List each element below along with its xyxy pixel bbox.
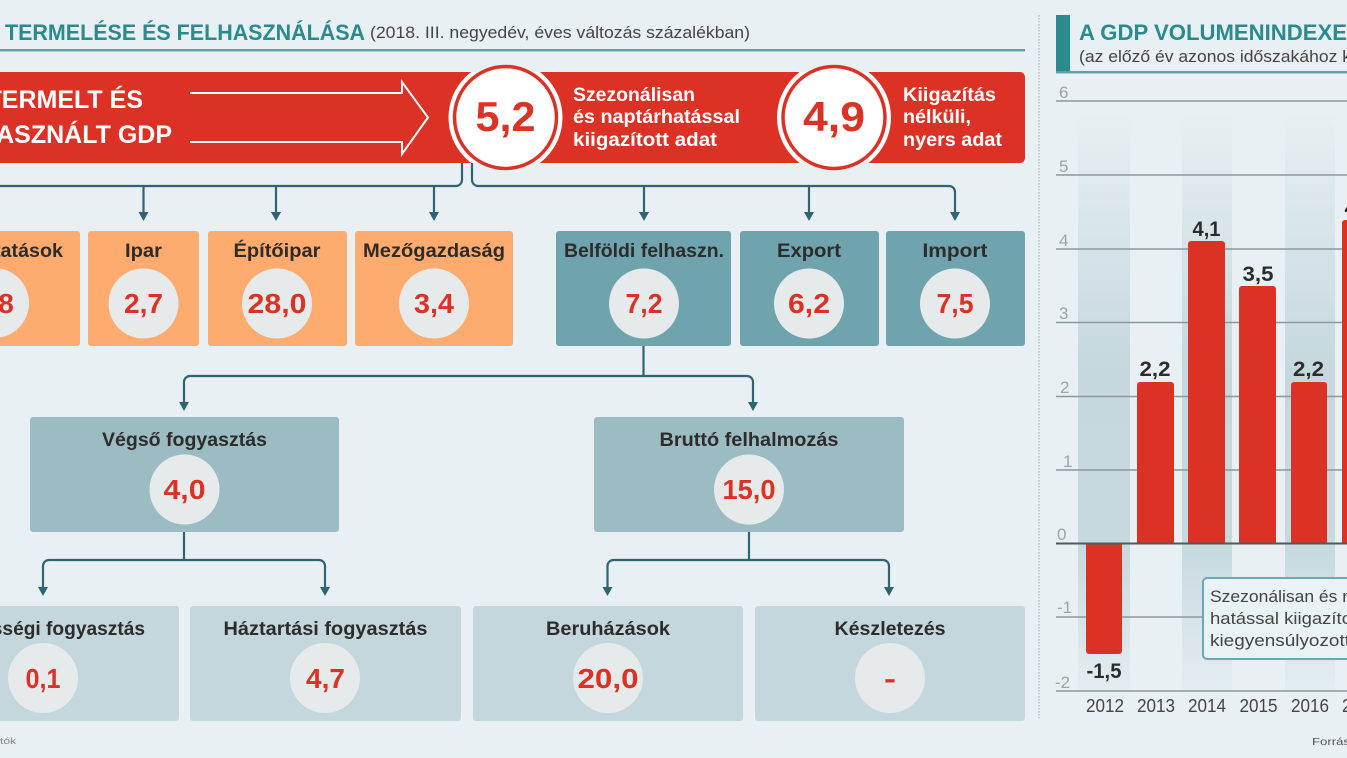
panel: investments bbox=[473, 606, 743, 721]
panel: construction: 28,0 bbox=[248, 288, 306, 319]
raw data caption bbox=[903, 85, 1003, 151]
gridlines and y axis: 6 bbox=[1059, 83, 1068, 102]
panel: inventories bbox=[755, 606, 1025, 721]
raw value circle: 4,9 bbox=[803, 93, 865, 140]
year labels: 2012 bbox=[1086, 696, 1124, 716]
value labels bbox=[1086, 197, 1347, 683]
panel: inventories: Készletezés bbox=[834, 619, 946, 640]
panel: red GDP banner bbox=[0, 60, 1025, 174]
panel: export bbox=[740, 231, 879, 346]
adjusted value circle bbox=[448, 60, 562, 174]
heading: GDP volume index bbox=[1056, 15, 1347, 73]
gridlines and y axis: -2 bbox=[1055, 673, 1070, 692]
heading: GDP volume index: A GDP VOLUMENINDEXE bbox=[1079, 20, 1347, 45]
panel: household consumption: Háztartási fogyasztás bbox=[224, 619, 428, 640]
panel: household consumption bbox=[190, 606, 461, 721]
panel: gross capital formation: Bruttó felhalmozás bbox=[660, 430, 838, 451]
panel: export: Export bbox=[777, 241, 842, 262]
gridlines and y axis: -1 bbox=[1057, 598, 1072, 617]
panel: domestic use: Belföldi felhaszn. bbox=[564, 241, 724, 262]
panel: import: 7,5 bbox=[936, 288, 974, 319]
value labels: -1,5 bbox=[1086, 660, 1122, 683]
panel: gross capital formation: 15,0 bbox=[722, 474, 776, 505]
gridlines and y axis: 4 bbox=[1059, 231, 1068, 250]
bars bbox=[1086, 220, 1347, 654]
year labels: 2015 bbox=[1240, 696, 1278, 716]
adjusted data caption: és naptárhatással bbox=[573, 107, 740, 128]
arrows: capital formation split bbox=[602, 532, 894, 596]
adjusted data caption: kiigazított adat bbox=[573, 130, 718, 151]
arrows: production branch bbox=[0, 163, 462, 221]
panel: import bbox=[886, 231, 1025, 346]
panel: agriculture bbox=[355, 231, 513, 346]
arrows: use branch bbox=[472, 163, 960, 221]
banner label bbox=[0, 85, 172, 149]
panel: community consumption: 0,1 bbox=[26, 663, 60, 694]
raw data caption: Kiigazítás bbox=[903, 85, 996, 106]
panel: household consumption: 4,7 bbox=[306, 663, 345, 694]
arrows: domestic use split bbox=[179, 346, 758, 411]
adjusted data caption bbox=[573, 85, 740, 151]
chart background bands bbox=[1078, 110, 1335, 692]
panel: import: Import bbox=[922, 241, 988, 262]
bar chart: GDP volume index bbox=[1055, 83, 1347, 716]
panel: domestic use: 7,2 bbox=[626, 288, 662, 319]
raw data caption: nyers adat bbox=[903, 130, 1003, 151]
panel: final consumption: Végső fogyasztás bbox=[102, 430, 267, 451]
callout: seasonally adjusted note: hatással kiigazíto bbox=[1210, 610, 1347, 628]
panel: community consumption bbox=[0, 606, 179, 721]
heading: GDP volume index: (az előző év azonos időszakához k bbox=[1079, 48, 1347, 66]
heading: production and use bbox=[0, 20, 1025, 51]
panel: final consumption: 4,0 bbox=[164, 474, 206, 505]
panel: investments: Beruházások bbox=[546, 619, 670, 640]
panel: industry: Ipar bbox=[125, 241, 163, 262]
panel: export: 6,2 bbox=[788, 288, 830, 319]
panel: final consumption bbox=[30, 417, 339, 532]
panel: agriculture: 3,4 bbox=[414, 288, 454, 319]
value labels: 2,2 bbox=[1293, 358, 1324, 381]
panel: services bbox=[0, 231, 80, 346]
year labels bbox=[1086, 696, 1347, 716]
panel: agriculture: Mezőgazdaság bbox=[363, 241, 505, 262]
arrows: final consumption split bbox=[38, 532, 330, 596]
value labels: 4,1 bbox=[1192, 218, 1221, 241]
footer note left: tók bbox=[0, 736, 17, 746]
panel: construction bbox=[208, 231, 347, 346]
gridlines and y axis: 2 bbox=[1060, 378, 1069, 397]
callout: seasonally adjusted note: Szezonálisan és n bbox=[1210, 588, 1347, 606]
panel: construction: Építőipar bbox=[234, 240, 321, 262]
heading: production and use: TERMELÉSE ÉS FELHASZNÁLÁSA bbox=[5, 20, 365, 45]
year labels: 2016 bbox=[1291, 696, 1329, 716]
adjusted value circle: 5,2 bbox=[476, 93, 536, 140]
year labels: 2013 bbox=[1137, 696, 1175, 716]
heading: production and use: (2018. III. negyedév, éves változás százalékban) bbox=[370, 24, 750, 42]
gridlines and y axis bbox=[1055, 83, 1347, 692]
gridlines and y axis: 1 bbox=[1063, 452, 1072, 471]
year labels: 2014 bbox=[1188, 696, 1226, 716]
gridlines and y axis: 3 bbox=[1059, 304, 1068, 323]
raw value circle bbox=[777, 60, 891, 174]
panel: gross capital formation bbox=[594, 417, 904, 532]
callout: seasonally adjusted note: kiegyensúlyozott bbox=[1210, 632, 1347, 650]
arrow: white outline bbox=[190, 82, 428, 154]
value labels: 2,2 bbox=[1140, 358, 1170, 381]
panel: industry: 2,7 bbox=[124, 288, 163, 319]
callout: seasonally adjusted note bbox=[1203, 578, 1347, 659]
raw data caption: nélküli, bbox=[903, 107, 971, 128]
panel: investments: 20,0 bbox=[578, 663, 638, 694]
value labels: 3,5 bbox=[1242, 263, 1274, 286]
panel: industry bbox=[88, 231, 199, 346]
gridlines and y axis: 0 bbox=[1057, 525, 1066, 544]
adjusted data caption: Szezonálisan bbox=[573, 85, 695, 106]
panel: domestic use bbox=[556, 231, 731, 346]
source note: Forrás bbox=[1312, 736, 1347, 748]
gridlines and y axis: 5 bbox=[1059, 157, 1068, 176]
panel: inventories: - bbox=[884, 663, 896, 694]
